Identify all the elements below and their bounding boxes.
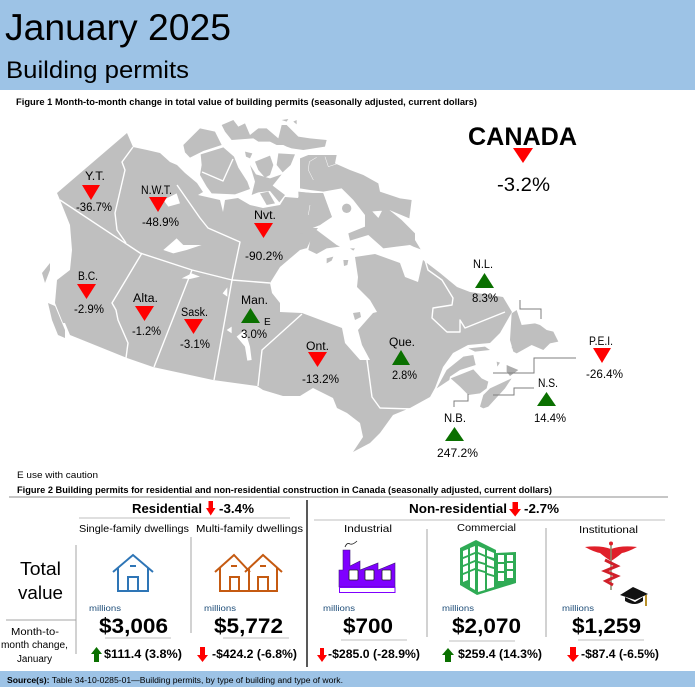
Belcher Islands — [353, 312, 361, 320]
Yukon label: -36.7% — [76, 202, 112, 214]
footer source bar — [0, 671, 695, 687]
Manitoba label: Man. — [241, 295, 268, 307]
Northwest Territories label: N.W.T. — [141, 185, 172, 197]
column: industrial: $700 — [343, 615, 393, 638]
Alberta label — [132, 293, 161, 338]
residential heading — [132, 501, 254, 516]
Ontario label: Ont. — [306, 341, 329, 353]
header banner: Building permits — [6, 57, 189, 84]
column: commercial: Commercial — [457, 522, 516, 534]
New Brunswick label — [437, 413, 478, 460]
Nunavut label: -90.2% — [245, 251, 283, 263]
column: industrial: -$285.0 (-28.9%) — [328, 649, 420, 661]
British Columbia label: B.C. — [78, 271, 98, 283]
row label: month-to-month change: Month-to- — [11, 627, 59, 638]
Vancouver Island — [48, 303, 65, 338]
Northwest Territories label — [141, 185, 179, 229]
Quebec label: 2.8% — [392, 370, 417, 382]
icon: orange houses — [215, 555, 282, 591]
Northwest Territories label: -48.9% — [142, 217, 179, 229]
Manitoba label: 3.0% — [241, 329, 267, 341]
Quebec label — [389, 337, 417, 382]
Yukon label — [76, 171, 112, 214]
residential heading: -3.4% — [219, 502, 254, 516]
row label: total value: Total — [20, 559, 61, 579]
Nova Scotia label — [534, 378, 566, 425]
leader lines — [454, 300, 576, 407]
lakes — [163, 193, 252, 361]
national summary: Canada — [468, 123, 577, 196]
Quebec label: Que. — [389, 337, 415, 349]
Nova Scotia — [480, 378, 512, 408]
row label: total value — [18, 559, 63, 603]
Ontario label: -13.2% — [302, 374, 339, 386]
column: institutional: millions — [562, 604, 594, 613]
Haida Gwaii — [42, 263, 50, 283]
Manitoba label: E — [264, 317, 271, 328]
column: multi-family dwellings: -$424.2 (-6.8%) — [212, 649, 297, 661]
New Brunswick label: N.B. — [444, 413, 466, 425]
caution note: E use with caution — [17, 470, 98, 481]
icon: factory — [339, 541, 395, 592]
icon: graduation cap — [620, 587, 648, 606]
column: multi-family dwellings: $5,772 — [214, 615, 283, 638]
British Columbia label — [74, 271, 104, 316]
icon: blue house — [113, 555, 153, 591]
header banner — [0, 0, 695, 90]
figure 1 heading: Figure 1 Month-to-month change in total value of building permits (seasonally adjusted, current dollars) — [16, 97, 477, 108]
column: industrial: millions — [323, 604, 355, 613]
Prince Edward Island label: P.E.I. — [589, 336, 613, 348]
column: multi-family dwellings: millions — [204, 604, 236, 613]
Nunavut label — [245, 210, 283, 263]
Gaspe peninsula — [437, 355, 476, 388]
column: multi-family dwellings: Multi-family dwellings — [196, 523, 303, 535]
column: industrial: Industrial — [344, 523, 392, 535]
column: single-family dwellings: Single-family dwellings — [79, 523, 189, 535]
New Brunswick label: 247.2% — [437, 448, 478, 460]
Anticosti Island — [468, 347, 490, 352]
column: commercial: millions — [442, 604, 474, 613]
Prince Edward Island label — [586, 336, 623, 381]
column: single-family dwellings: $111.4 (3.8%) — [104, 649, 182, 661]
Alberta label: Alta. — [133, 293, 158, 305]
Newfoundland — [510, 310, 558, 353]
row label: month-to-month change — [1, 627, 68, 665]
column: commercial — [442, 522, 542, 662]
non-residential heading — [409, 502, 559, 516]
residential heading: Residential — [132, 502, 202, 516]
column: single-family dwellings: millions — [89, 604, 121, 613]
provincial borders — [60, 147, 505, 409]
Prince Edward Island label: -26.4% — [586, 369, 623, 381]
Nova Scotia label: N.S. — [538, 378, 558, 390]
row label: total value: value — [18, 583, 63, 603]
national summary: Canada: -3.2% — [497, 175, 550, 196]
non-residential heading: Non-residential — [409, 502, 507, 516]
column: industrial — [317, 523, 420, 662]
Ontario label — [302, 341, 339, 386]
column: institutional: Institutional — [579, 524, 638, 536]
Nunavut label: Nvt. — [254, 210, 276, 222]
row label: month-to-month change: month change, — [1, 640, 68, 651]
British Columbia label: -2.9% — [74, 304, 104, 316]
Saskatchewan label: -3.1% — [180, 339, 210, 351]
footer source bar: Source(s): Table 34-10-0285-01—Building permits, by type of building and type of work. — [7, 676, 343, 685]
column: multi-family dwellings — [196, 523, 303, 662]
column: institutional — [562, 524, 659, 662]
Newfoundland and Labrador label: 8.3% — [472, 293, 498, 305]
Arctic inlets — [308, 157, 382, 218]
Newfoundland and Labrador label: N.L. — [473, 259, 493, 271]
icon: green building — [460, 540, 516, 595]
row label: month-to-month change: January — [17, 654, 52, 665]
non-residential heading: -2.7% — [524, 502, 559, 516]
Baffin Island — [300, 155, 421, 249]
Saskatchewan label: Sask. — [181, 307, 208, 319]
Nova Scotia label: 14.4% — [534, 413, 566, 425]
national summary: Canada: CANADA — [468, 123, 577, 151]
column: institutional: -$87.4 (-6.5%) — [581, 649, 659, 661]
column: commercial: $2,070 — [452, 615, 521, 638]
small gulf islands — [497, 362, 500, 367]
table rules — [6, 497, 668, 667]
header banner: January 2025 — [5, 7, 231, 48]
Yukon label: Y.T. — [85, 171, 105, 183]
figure 2 heading: Figure 2 Building permits for residential and non-residential construction in Canada (seasonally adjusted, current dollars) — [17, 485, 552, 496]
Alberta label: -1.2% — [132, 326, 161, 338]
Cape Breton Island — [507, 365, 518, 376]
New Brunswick — [451, 369, 488, 395]
column: institutional: $1,259 — [572, 615, 641, 638]
Southampton Island — [308, 230, 340, 254]
Saskatchewan label — [180, 307, 210, 351]
Manitoba label — [241, 295, 271, 341]
column: commercial: $259.4 (14.3%) — [458, 649, 542, 661]
column: single-family dwellings — [79, 523, 189, 662]
icon: caduceus — [585, 542, 637, 590]
Melville Peninsula — [298, 192, 332, 233]
Newfoundland and Labrador label — [472, 259, 498, 305]
map of Canada — [42, 119, 576, 452]
column: single-family dwellings: $3,006 — [99, 615, 168, 638]
